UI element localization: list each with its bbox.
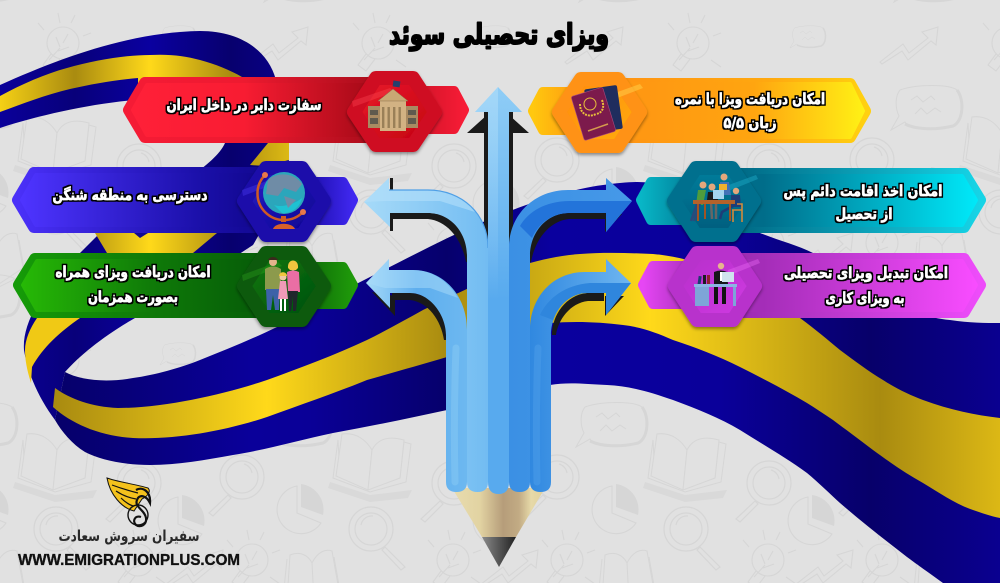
- icon: team at table: [691, 174, 742, 222]
- hexagon: [559, 79, 640, 146]
- arrow: upper left: [364, 178, 488, 492]
- text: امکان تبدیل ویزای تحصیلی: [784, 264, 948, 282]
- panel: change to work visa: [643, 253, 980, 320]
- icon: passports: [571, 85, 623, 141]
- hexagon: [244, 168, 324, 235]
- tail: [643, 266, 700, 304]
- tail: [533, 92, 590, 130]
- text: دسترسی به منطقه شنگن: [52, 186, 208, 204]
- text: امکان اخذ اقامت دائم پس: [784, 182, 942, 201]
- icon: globe: [257, 172, 306, 229]
- panel: visa for companions: بصورت همزمان: [88, 288, 178, 306]
- band: [740, 174, 980, 227]
- panel: change to work visa: به ویزای کاری: [826, 289, 904, 307]
- hexagon: [354, 78, 435, 145]
- arrow: lower right: [530, 259, 631, 492]
- panel: visa with IELTS 5.5: زبان ۵/۵: [724, 114, 776, 132]
- hexagon: [674, 168, 754, 235]
- icon: family: [265, 257, 300, 311]
- company name: سفیران سروش سعادت: [58, 527, 200, 545]
- icon: winged S emblem: [107, 478, 150, 526]
- band: [621, 84, 865, 137]
- panel: permanent residence: [641, 168, 980, 235]
- hexagon: [675, 253, 755, 320]
- panel: Schengen access: [18, 168, 353, 238]
- website: WWW.EMIGRATIONPLUS.COM: [18, 552, 240, 569]
- tail: [641, 182, 700, 220]
- logo: [18, 478, 240, 569]
- arrow: lower left: [366, 259, 467, 492]
- panel: embassy in Iran: [129, 78, 464, 145]
- text: امکان دریافت ویزای همراه: [56, 263, 210, 281]
- tail: [300, 182, 353, 220]
- pencil wood tip: [452, 488, 545, 537]
- tail: [300, 267, 353, 304]
- tail: [380, 91, 464, 129]
- band: [19, 259, 280, 312]
- arrow: centre up: [475, 87, 522, 494]
- band: [18, 173, 280, 227]
- band: [129, 83, 380, 137]
- notch under band: [134, 233, 148, 238]
- arrow: upper right: [509, 178, 632, 492]
- panel: visa for companions: [19, 253, 353, 320]
- title: ویزای تحصیلی سوئد: [389, 18, 609, 51]
- text: سفارت دایر در داخل ایران: [166, 96, 322, 114]
- hexagon: [244, 253, 324, 320]
- arrow shadows: [372, 112, 624, 340]
- icon: office desk: [694, 263, 737, 306]
- panel: permanent residence: از تحصیل: [836, 205, 892, 223]
- band: [740, 259, 980, 312]
- pencil graphite point: [482, 537, 516, 567]
- text: امکان دریافت ویزا با نمره: [675, 90, 825, 108]
- pencil with five arrows: [364, 87, 632, 567]
- panel: visa with IELTS 5.5: [533, 79, 865, 146]
- icon: embassy building: [368, 80, 418, 131]
